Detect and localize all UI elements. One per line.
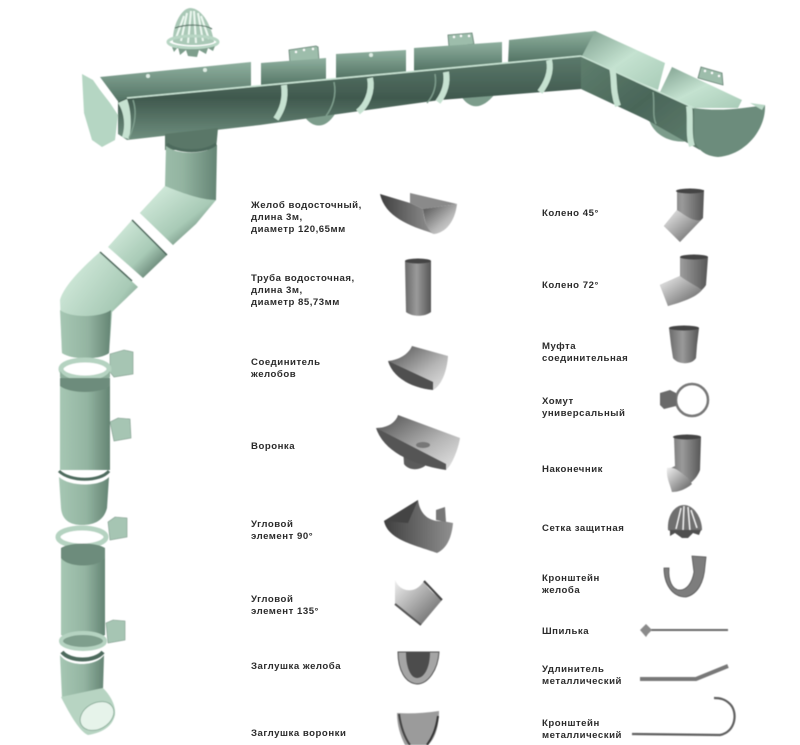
label: gutter: диаметр 120,65мм bbox=[251, 224, 346, 235]
icon: gutter bracket bbox=[664, 556, 706, 597]
label: clamp: универсальный bbox=[542, 408, 625, 419]
label: metal bracket: Кронштейн bbox=[542, 718, 600, 729]
panel: top mounting brackets bbox=[289, 33, 723, 85]
panel: downpipe outlet tip bbox=[61, 688, 119, 736]
label: knee 72: Колено 72° bbox=[542, 280, 599, 291]
label: extender: металлический bbox=[542, 676, 622, 687]
label: pipe: диаметр 85,73мм bbox=[251, 297, 340, 308]
label: knee 45: Колено 45° bbox=[542, 208, 599, 219]
label: gutter: длина 3м, bbox=[251, 212, 303, 223]
icon: threaded stud bbox=[640, 624, 728, 637]
label: funnel cap: Заглушка воронки bbox=[251, 728, 346, 739]
icon: pipe bbox=[405, 258, 431, 316]
icon: gutter connector bbox=[388, 346, 448, 390]
icon: corner 90 bbox=[384, 500, 453, 553]
icon: pipe tip bbox=[667, 434, 701, 492]
label: gutter bracket: желоба bbox=[541, 585, 580, 596]
icon: knee 72 bbox=[660, 254, 708, 306]
panel: right column icons bbox=[632, 188, 735, 735]
icon: metal bracket bbox=[632, 698, 735, 735]
label: metal bracket: металлический bbox=[542, 730, 622, 741]
label: stud: Шпилька bbox=[542, 626, 589, 637]
panel: right gutter end cap bbox=[694, 105, 765, 157]
panel: thin gutter ribs bbox=[129, 74, 656, 138]
label: coupling: Муфта bbox=[542, 341, 576, 352]
icon: protective mesh bbox=[668, 505, 702, 538]
label: corner 135: элемент 135° bbox=[251, 606, 319, 617]
label: coupling: соединительная bbox=[542, 353, 628, 364]
label: extender: Удлинитель bbox=[542, 664, 604, 675]
icon: metal extender bbox=[640, 666, 728, 679]
label: pipe: длина 3м, bbox=[251, 285, 303, 296]
label: funnel: Воронка bbox=[251, 441, 295, 452]
label: connector: Соединитель bbox=[251, 357, 321, 368]
label: gutter cap: Заглушка желоба bbox=[251, 661, 341, 672]
icon: coupling bbox=[669, 326, 699, 363]
label: tip: Наконечник bbox=[542, 464, 603, 475]
label: corner 90: элемент 90° bbox=[251, 531, 313, 542]
icon: funnel outlet bbox=[376, 415, 460, 470]
icon: leaf guard on top of gutter bbox=[168, 8, 218, 57]
panel: hanging gutter bracket bottoms bbox=[304, 94, 690, 142]
panel: left column parts bbox=[250, 200, 362, 739]
panel: downpipe neck and collar bbox=[140, 128, 218, 245]
label: corner 90: Угловой bbox=[251, 519, 293, 530]
panel: light gutter joint bands bbox=[276, 60, 692, 146]
icon: universal clamp bbox=[660, 384, 708, 416]
panel: gutter front face bbox=[118, 56, 700, 150]
icon: gutter cap bbox=[398, 652, 439, 684]
panel: left gutter end cap bbox=[82, 74, 118, 147]
label: corner 135: Угловой bbox=[251, 594, 293, 605]
icon: knee 45 bbox=[664, 188, 704, 242]
panel: gutter back wall sections bbox=[100, 31, 742, 108]
panel: right column parts bbox=[541, 208, 628, 741]
panel: vertical downpipe sections bbox=[59, 378, 110, 698]
icon: corner 135 bbox=[395, 580, 442, 625]
label: pipe: Труба водосточная, bbox=[251, 273, 355, 284]
panel: diagonal downpipe segment bbox=[108, 220, 167, 278]
label: gutter bracket: Кронштейн bbox=[542, 573, 600, 584]
panel: left column icons bbox=[376, 193, 460, 745]
label: clamp: Хомут bbox=[542, 396, 574, 407]
icon: gutter bbox=[380, 193, 457, 234]
panel: pipe clamps with wall brackets bbox=[58, 350, 133, 643]
panel: lower elbow bbox=[60, 252, 138, 358]
label: connector: желобов bbox=[250, 369, 296, 380]
label: protective mesh: Сетка защитная bbox=[542, 523, 624, 534]
label: gutter: Желоб водосточный, bbox=[250, 200, 362, 211]
icon: funnel cap bbox=[397, 711, 439, 745]
